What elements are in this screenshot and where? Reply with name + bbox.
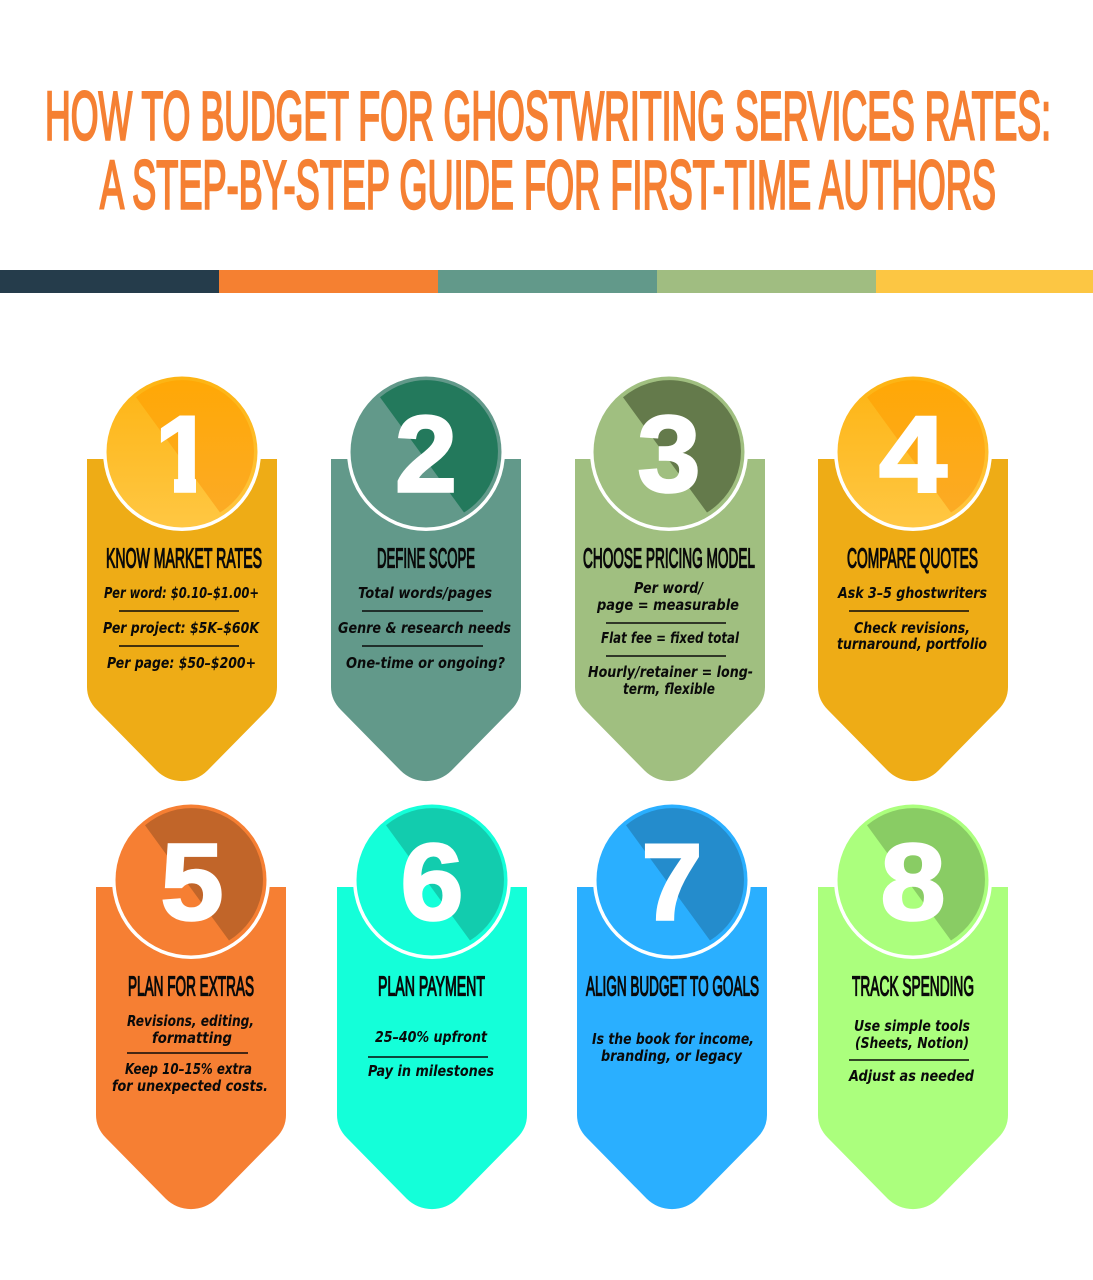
details: Genre & research needs — [338, 619, 511, 637]
number 1: 1 — [155, 394, 213, 516]
number 7: 7 — [642, 822, 702, 944]
details: Check revisions, — [854, 619, 970, 637]
panel: step 1 know market rates — [87, 373, 277, 781]
number 6: 6 — [400, 822, 464, 944]
details — [588, 579, 753, 698]
panel: step 6 plan payment — [337, 801, 527, 1209]
details: Per word/ — [634, 579, 704, 597]
details: Hourly/retainer = long- — [588, 663, 753, 681]
details — [592, 1030, 754, 1065]
details: Use simple tools — [854, 1017, 970, 1035]
details: Revisions, editing, — [127, 1012, 254, 1030]
details: page = measurable — [596, 596, 739, 614]
details: branding, or legacy — [601, 1047, 743, 1065]
panel: step 7 align budget to goals: ALIGN BUDGET TO GOALS — [586, 970, 759, 1001]
title — [45, 78, 1051, 224]
details — [338, 584, 511, 672]
colour bar — [0, 270, 1093, 293]
number 5: 5 — [160, 822, 224, 944]
details: Total words/pages — [358, 584, 492, 602]
details: Pay in milestones — [368, 1062, 494, 1080]
details: One-time or ongoing? — [346, 654, 505, 672]
details: for unexpected costs. — [112, 1077, 268, 1095]
panel: step 5 plan for extras: PLAN FOR EXTRAS — [128, 970, 254, 1001]
details: Flat fee = fixed total — [601, 629, 740, 647]
heading: KNOW MARKET RATES — [106, 542, 262, 573]
panel: step 2 define scope — [331, 373, 521, 781]
details: Ask 3–5 ghostwriters — [837, 584, 987, 602]
details — [112, 1012, 268, 1095]
details: 25–40% upfront — [375, 1028, 488, 1046]
panel: step 5 plan for extras — [96, 801, 286, 1209]
panel: step 8 track spending — [818, 801, 1008, 1209]
panel: step 2 define scope: DEFINE SCOPE — [377, 542, 475, 573]
details: Per page: $50–$200+ — [107, 654, 256, 672]
details: Per project: $5K–$60K — [103, 619, 260, 637]
details: turnaround, portfolio — [837, 635, 987, 653]
panel: step 4 compare quotes — [818, 373, 1008, 781]
number 3: 3 — [638, 394, 700, 516]
details — [837, 584, 987, 653]
details: Is the book for income, — [592, 1030, 754, 1048]
panel: step 3 choose pricing model: CHOOSE PRICING MODEL — [583, 542, 755, 573]
details — [103, 584, 260, 672]
number 4: 4 — [879, 394, 947, 516]
details: Adjust as needed — [848, 1067, 974, 1085]
panel: step 7 align budget to goals — [577, 801, 767, 1209]
details: Per word: $0.10–$1.00+ — [104, 584, 259, 602]
details: formatting — [152, 1029, 232, 1047]
number 8: 8 — [880, 822, 946, 944]
details — [368, 1028, 494, 1080]
number 2: 2 — [395, 394, 457, 516]
details — [848, 1017, 974, 1085]
details: (Sheets, Notion) — [855, 1034, 969, 1052]
panel: step 3 choose pricing model — [575, 373, 765, 781]
details: term, flexible — [623, 680, 715, 698]
heading: PLAN PAYMENT — [378, 970, 485, 1001]
details: Keep 10–15% extra — [125, 1060, 252, 1078]
